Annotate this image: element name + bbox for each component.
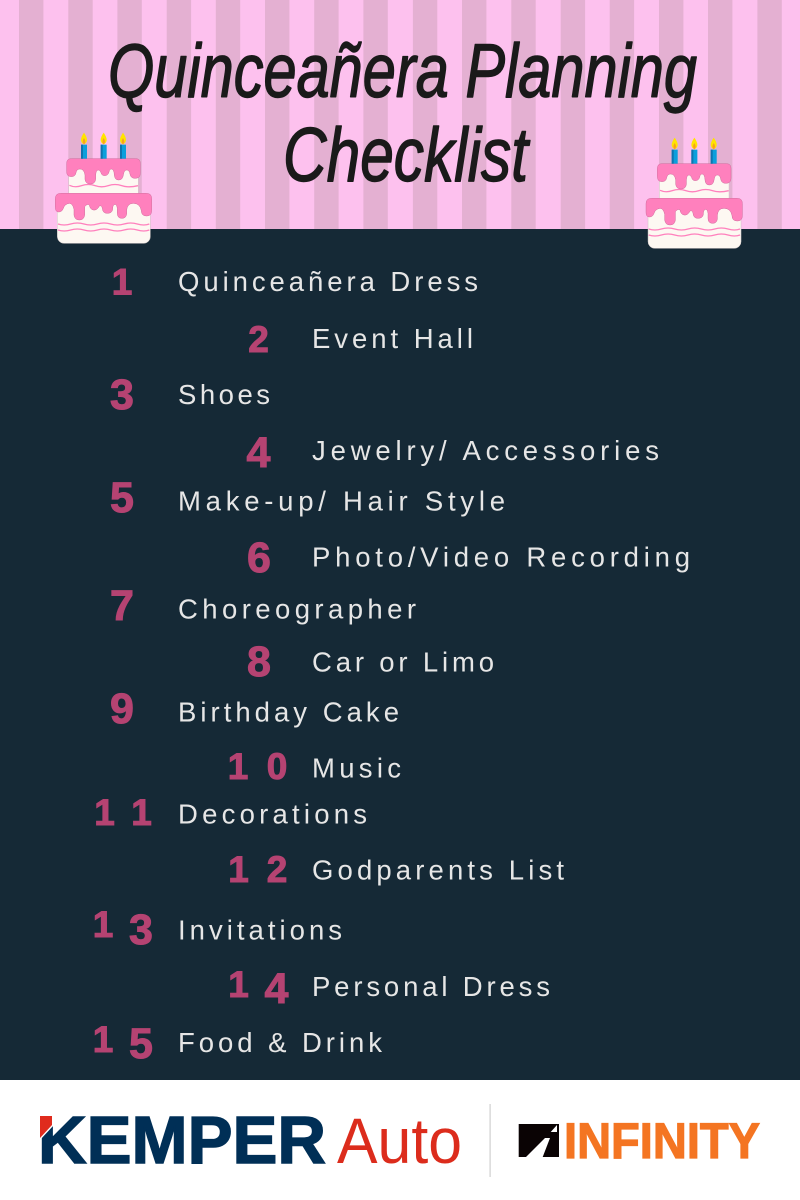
checklist item 1: Quinceañera Dress [178, 266, 478, 297]
checklist item 7 [110, 582, 416, 630]
checklist item 14: 1 [228, 964, 249, 1005]
checklist item 12 [228, 849, 564, 890]
logo: Kemper Auto: KEMPER [38, 1103, 326, 1178]
checklist item 2 [248, 319, 473, 360]
panel: white footer [0, 1080, 800, 1200]
checklist item 7: 7 [110, 582, 134, 630]
logo: Kemper Auto: Auto [337, 1105, 462, 1177]
checklist item 8 [247, 638, 494, 686]
checklist item 8: 8 [247, 638, 271, 686]
checklist item 5 [110, 474, 505, 522]
checklist item 12: Godparents List [312, 854, 564, 886]
title [108, 29, 697, 198]
checklist item 11: 1 [131, 792, 152, 833]
checklist item 15: 1 [93, 1019, 113, 1060]
checklist item 6: 6 [247, 534, 271, 582]
checklist item 10: Music [312, 752, 401, 784]
checklist item 3: Shoes [178, 379, 270, 410]
checklist item 6 [247, 534, 690, 582]
divider [490, 1104, 491, 1177]
icon: birthday cake right [646, 138, 742, 248]
checklist item 12: 1 [228, 849, 249, 890]
checklist item 6: Photo/Video Recording [312, 542, 690, 572]
checklist item 13: 1 [93, 904, 113, 945]
checklist item 4: Jewelry/ Accessories [312, 435, 659, 466]
checklist item 12: 2 [267, 849, 287, 890]
checklist item 7: Choreographer [178, 594, 416, 624]
checklist item 9: 9 [110, 685, 134, 733]
checklist item 10: 1 [228, 746, 248, 787]
panel: striped pink header [0, 0, 800, 229]
checklist item 5: Make-up/ Hair Style [178, 486, 505, 516]
checklist item 1: 1 [112, 262, 132, 302]
checklist item 14: 4 [265, 965, 289, 1013]
checklist item 11 [94, 792, 367, 833]
checklist item 9: Birthday Cake [178, 696, 399, 728]
checklist item 13: Invitations [178, 914, 342, 946]
checklist item 15 [93, 1019, 382, 1068]
checklist item 5: 5 [110, 474, 134, 522]
logo: Kemper Auto [36, 1103, 462, 1178]
checklist item 9 [110, 685, 399, 733]
checklist item 10: 0 [267, 746, 287, 787]
checklist item 3: 3 [110, 371, 134, 419]
checklist item 15: 5 [129, 1020, 153, 1068]
checklist item 4: 4 [247, 429, 271, 477]
checklist item 13 [93, 904, 342, 954]
checklist item 15: Food & Drink [178, 1027, 382, 1058]
icon: birthday cake left [55, 133, 152, 243]
checklist item 14 [228, 964, 550, 1013]
checklist item 3 [110, 371, 270, 419]
logo: Infinity: INFINITY [564, 1113, 760, 1169]
checklist item 13: 3 [129, 906, 153, 954]
checklist item 8: Car or Limo [312, 646, 494, 678]
checklist item 10 [228, 746, 401, 787]
panel: dark checklist background [0, 229, 800, 1080]
checklist item 11: Decorations [178, 798, 367, 830]
checklist item 2: Event Hall [312, 323, 473, 354]
checklist item 11: 1 [94, 792, 115, 833]
checklist item 4 [247, 429, 659, 477]
checklist item 14: Personal Dress [312, 971, 550, 1002]
checklist item 1 [112, 262, 478, 302]
title: Checklist [283, 113, 530, 198]
checklist item 2: 2 [248, 319, 269, 360]
